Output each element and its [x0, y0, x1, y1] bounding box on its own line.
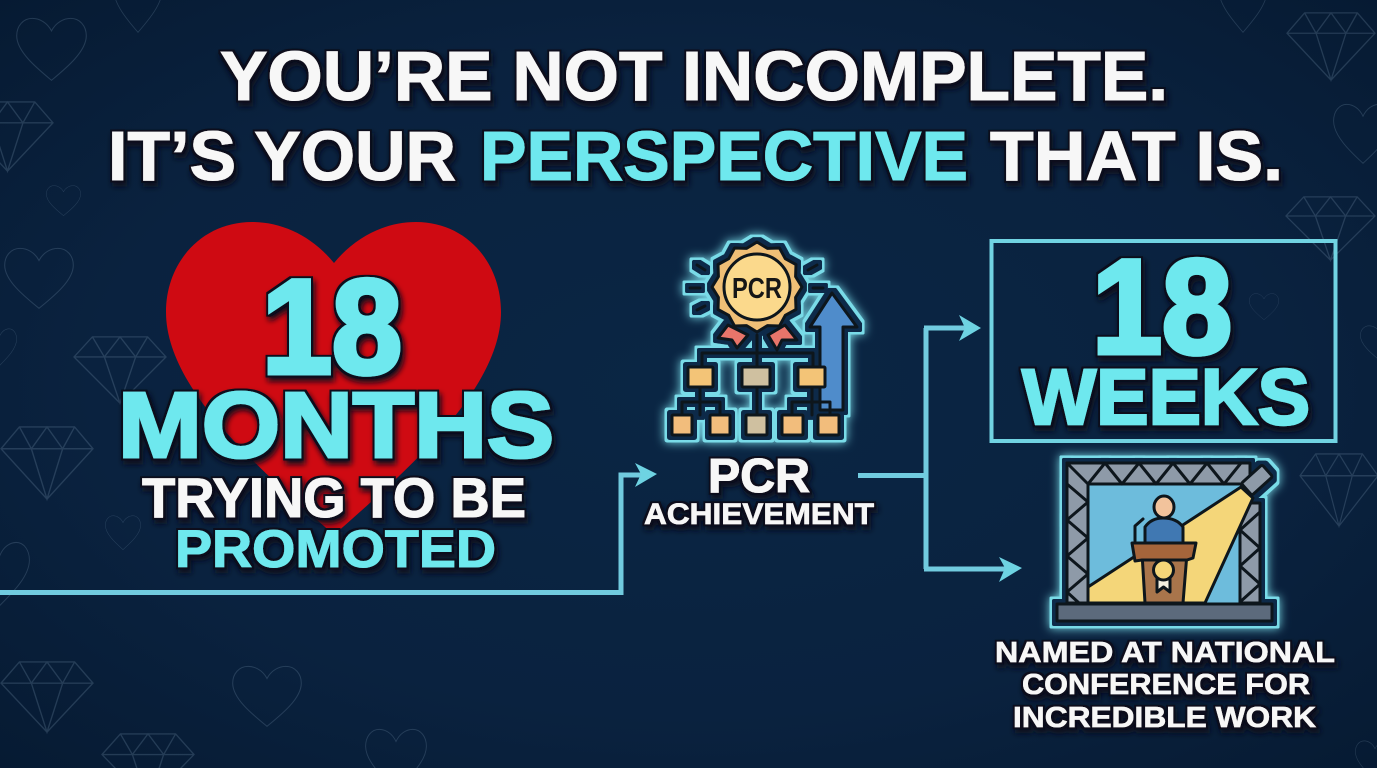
- conference caption: CONFERENCE FOR: [1022, 669, 1310, 701]
- stat text: 18: [1092, 233, 1232, 382]
- icon part: spotlight beam: [1088, 487, 1253, 603]
- icon part: lectern: [1142, 553, 1187, 603]
- box: 18 weeks: [992, 233, 1336, 441]
- PCR label: ACHIEVEMENT: [644, 498, 874, 531]
- PCR label: PCR: [708, 450, 810, 503]
- title: PERSPECTIVE: [480, 117, 968, 195]
- title: THAT IS.: [990, 117, 1283, 195]
- title: IT’S YOUR: [108, 117, 456, 195]
- conference caption: [995, 637, 1335, 734]
- icon part: rays: [690, 265, 823, 310]
- icon part: growth arrow: [810, 293, 857, 410]
- red heart: [166, 222, 501, 535]
- conference caption: INCREDIBLE WORK: [1013, 702, 1316, 734]
- icon part: boxes: [672, 367, 839, 435]
- icon part: tree connectors: [682, 335, 830, 415]
- arrow: to PCR: [0, 463, 657, 592]
- icon part: stage base: [1057, 604, 1272, 621]
- conference caption: NAMED AT NATIONAL: [995, 637, 1335, 669]
- icon part: badge text: PCR: [732, 273, 782, 305]
- PCR label: [644, 450, 874, 531]
- stat text: [1022, 233, 1310, 441]
- icon part: lamp: [1241, 465, 1273, 495]
- stat text: WEEKS: [1022, 352, 1310, 441]
- title: [108, 37, 1283, 195]
- left stat: 18 months: MONTHS: [118, 373, 554, 477]
- left stat: 18 months: 18: [262, 253, 402, 402]
- left stat: 18 months: TRYING TO BE: [142, 466, 526, 529]
- icon part: sky backdrop: [1088, 484, 1240, 603]
- icon: PCR achievement: [672, 242, 857, 435]
- icon: conference stage: [1057, 463, 1273, 621]
- icon part: truss: [1067, 463, 1250, 603]
- icon part: ribbons: [718, 325, 748, 348]
- title: YOU’RE NOT INCOMPLETE.: [220, 37, 1168, 115]
- icon part: speaker: [1145, 518, 1183, 544]
- arrows: branch to outcomes: [858, 315, 1022, 582]
- left stat: 18 months: PROMOTED: [175, 520, 496, 579]
- left stat: 18 months: [118, 253, 554, 579]
- icon part: badge: [712, 242, 802, 332]
